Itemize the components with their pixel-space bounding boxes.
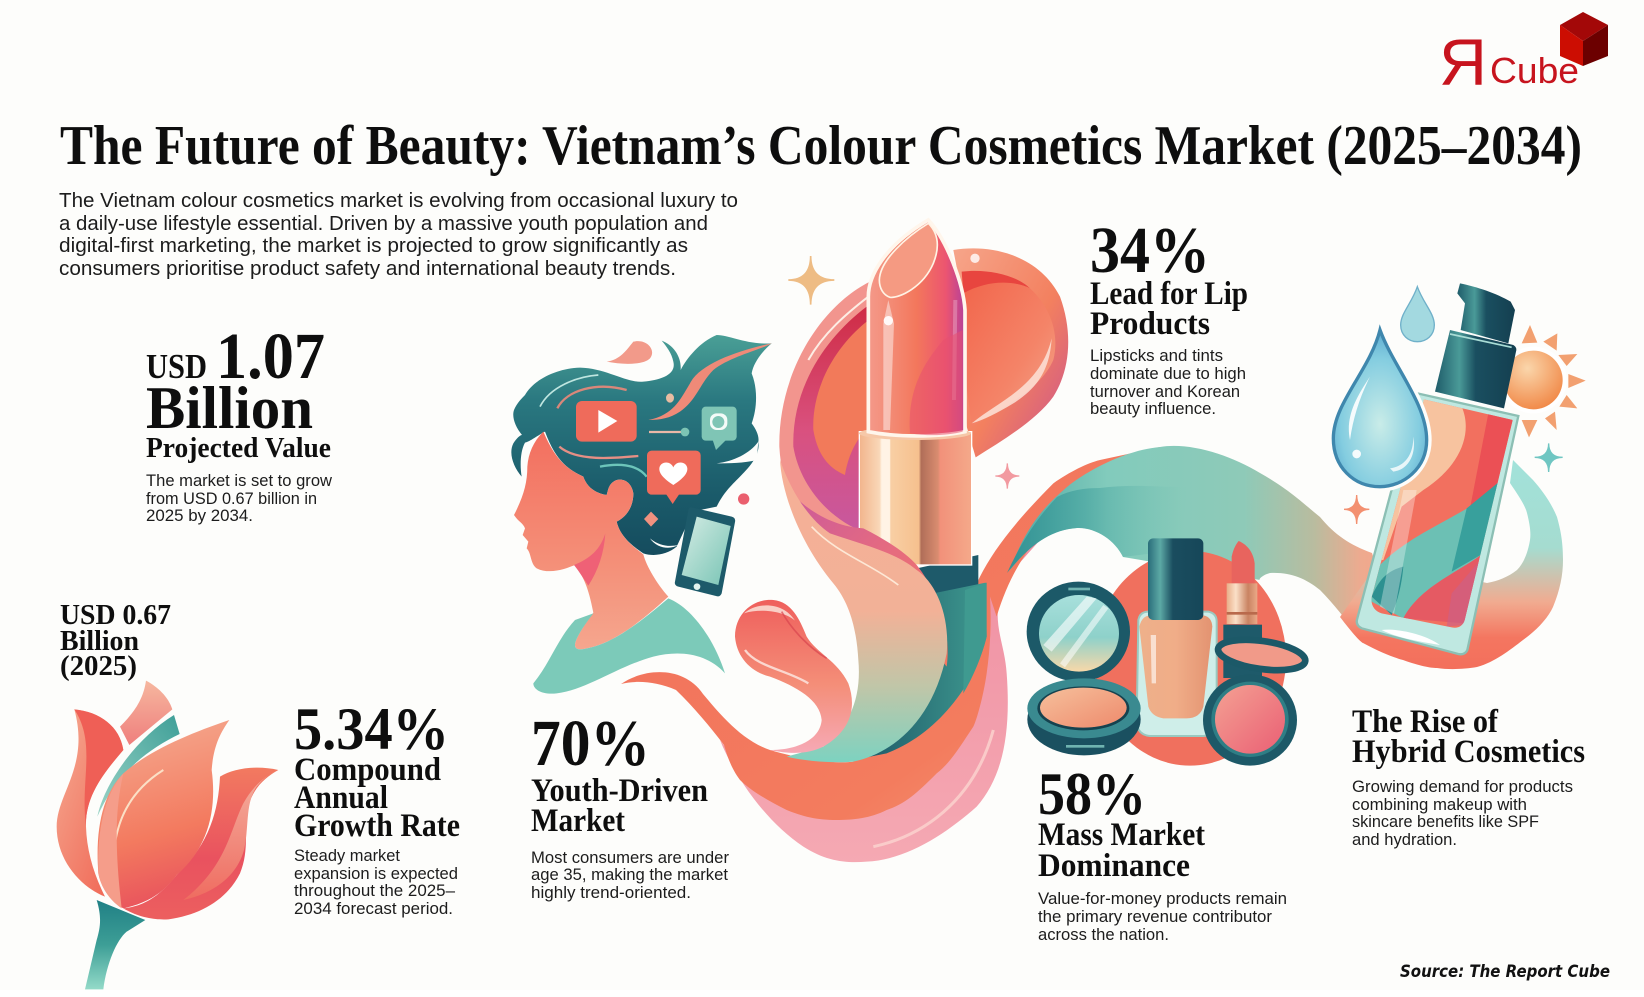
sun icon bbox=[1500, 325, 1586, 437]
ribbon: loop behind the bottle bbox=[1340, 460, 1563, 669]
ribbon: teal band across the middle bbox=[1007, 446, 1400, 643]
stat: 5.34% CAGR: Growth Rate bbox=[294, 808, 460, 844]
stat: 5.34% CAGR: 2034 forecast period. bbox=[294, 900, 453, 918]
bottle body bbox=[1357, 393, 1520, 654]
stat: USD 1.07 billion projected value: Billion bbox=[146, 375, 313, 441]
stat: 5.34% CAGR: expansion is expected bbox=[294, 865, 458, 883]
stat: 58% mass market dominance: across the nation. bbox=[1038, 926, 1169, 944]
mirror compact bbox=[1027, 582, 1130, 682]
stat: 34% lip products: Lead for Lip bbox=[1090, 276, 1248, 312]
illustration: hybrid cosmetics bottle bbox=[1333, 283, 1586, 654]
lipstick collar bbox=[859, 427, 972, 565]
lipstick base bbox=[853, 555, 987, 760]
face and neck bbox=[514, 432, 668, 649]
logo cube icon bbox=[1560, 12, 1608, 66]
sparkle: coral bbox=[1344, 495, 1369, 524]
intro paragraph: digital-first marketing, the market is projected to grow significantly as bbox=[59, 235, 688, 257]
stat: USD 0.67 billion 2025: USD 0.67 bbox=[60, 600, 171, 631]
illustration: ribbons and lipstick bbox=[621, 220, 1160, 862]
lip gloss swoosh: right bbox=[953, 248, 1068, 457]
stat: USD 1.07 billion projected value: 1.07 bbox=[216, 320, 325, 393]
stat: USD 0.67 billion 2025: (2025) bbox=[60, 651, 137, 682]
ribbon shine bbox=[812, 527, 898, 585]
icon: tulip bbox=[57, 681, 278, 989]
blush compact bbox=[1203, 635, 1307, 766]
neck shadow bbox=[574, 533, 605, 586]
icon: connector line bbox=[649, 428, 689, 436]
stat: rise of hybrid cosmetics: skincare benefits like SPF bbox=[1352, 813, 1539, 831]
stat: USD 0.67 billion 2025: Billion bbox=[60, 626, 139, 657]
logo: RCube bbox=[1439, 12, 1608, 99]
stat: 58% mass market dominance bbox=[1038, 761, 1287, 944]
stat: 58% mass market dominance: the primary revenue contributor bbox=[1038, 908, 1273, 926]
stat: USD 0.67 billion 2025 bbox=[60, 600, 171, 682]
stat: 5.34% CAGR: 5.34% bbox=[294, 696, 449, 762]
stat: 58% mass market dominance: Dominance bbox=[1038, 848, 1190, 884]
stat: USD 1.07 billion projected value: The market is set to grow bbox=[146, 472, 332, 490]
stat: 70% youth-driven market: 70% bbox=[531, 707, 650, 780]
stat: 70% youth-driven market: Most consumers are under bbox=[531, 849, 729, 867]
stat: rise of hybrid cosmetics: combining makeup with bbox=[1352, 796, 1527, 814]
stat: 70% youth-driven market: Youth-Driven bbox=[531, 773, 708, 809]
coral circle backdrop bbox=[1094, 551, 1286, 766]
coral ribbon bbox=[621, 447, 1160, 820]
pink ribbon bbox=[720, 540, 1040, 862]
intro paragraph: a daily-use lifestyle essential. Driven by a massive youth population and bbox=[59, 213, 708, 235]
lipstick bullet bbox=[868, 220, 965, 436]
stat: 70% youth-driven market: Market bbox=[531, 803, 625, 839]
stat: 5.34% CAGR: Steady market bbox=[294, 847, 400, 865]
stat: rise of hybrid cosmetics: and hydration. bbox=[1352, 831, 1457, 849]
stat: 5.34% CAGR: Compound bbox=[294, 752, 441, 788]
stat: 34% lip products: turnover and Korean bbox=[1090, 383, 1240, 401]
stat: USD 1.07 billion projected value: 2025 by 2034. bbox=[146, 507, 253, 525]
icon: chat bubble bbox=[702, 407, 737, 450]
lip gloss swoosh: left bbox=[779, 282, 870, 580]
stat: rise of hybrid cosmetics: The Rise of bbox=[1352, 704, 1499, 740]
stat: 58% mass market dominance: Value-for-money products remain bbox=[1038, 890, 1287, 908]
illustration: woman with social media icons bbox=[511, 335, 772, 694]
stat: rise of hybrid cosmetics: Hybrid Cosmetics bbox=[1352, 734, 1585, 770]
hair highlights bbox=[540, 343, 772, 548]
stat: 70% youth-driven market bbox=[531, 707, 729, 902]
stat: 34% lip products: beauty influence. bbox=[1090, 400, 1216, 418]
shoulders bbox=[533, 598, 725, 694]
lip gloss blob bbox=[735, 600, 852, 753]
drop highlights bbox=[1349, 377, 1414, 472]
stat: USD 1.07 billion projected value bbox=[146, 320, 332, 525]
ribbon highlight bbox=[873, 730, 993, 847]
icon: video play bubble bbox=[576, 401, 637, 442]
stat: USD 1.07 billion projected value: USD bbox=[146, 347, 207, 386]
stat: rise of hybrid cosmetics: Growing demand for products bbox=[1352, 778, 1573, 796]
stat: 34% lip products: Products bbox=[1090, 306, 1210, 342]
sparkle: pink bbox=[995, 463, 1019, 489]
logo wordmark: Cube bbox=[1490, 50, 1579, 91]
illustration: makeup products bbox=[1027, 538, 1307, 766]
stat: 34% lip products bbox=[1090, 214, 1248, 418]
sparkle: teal bbox=[1535, 443, 1563, 472]
stat: 5.34% CAGR bbox=[294, 696, 460, 918]
stat: 58% mass market dominance: Mass Market bbox=[1038, 817, 1205, 853]
foundation bottle bbox=[1137, 538, 1217, 736]
stat: 34% lip products: 34% bbox=[1090, 214, 1210, 287]
intro paragraph: consumers prioritise product safety and international beauty trends. bbox=[59, 258, 676, 280]
logo wordmark bbox=[1439, 25, 1579, 99]
small lipstick bbox=[1223, 541, 1262, 678]
icon: heart bubble bbox=[647, 451, 701, 504]
peach to teal ribbon bbox=[780, 460, 947, 762]
source note: Source: The Report Cube bbox=[1400, 962, 1610, 982]
intro paragraph bbox=[59, 190, 738, 280]
stat: 34% lip products: dominate due to high bbox=[1090, 365, 1246, 383]
large water drop bbox=[1333, 330, 1427, 487]
stat: USD 1.07 billion projected value: Projected Value bbox=[146, 433, 331, 464]
stat: 70% youth-driven market: highly trend-oriented. bbox=[531, 884, 691, 902]
bottle pump bbox=[1435, 283, 1516, 408]
magenta ribbon edge bbox=[783, 483, 948, 667]
icon: smartphone bbox=[675, 507, 735, 596]
accent dots bbox=[644, 393, 749, 527]
sparkle: gold bbox=[788, 256, 834, 305]
logo wordmark: Я bbox=[1439, 25, 1487, 99]
stat: 5.34% CAGR: throughout the 2025– bbox=[294, 882, 456, 900]
stat: 70% youth-driven market: age 35, making the market bbox=[531, 866, 728, 884]
petal above hair bbox=[607, 341, 652, 364]
powder compact bbox=[1027, 678, 1141, 755]
stat: 5.34% CAGR: Annual bbox=[294, 780, 388, 816]
stat: rise of hybrid cosmetics bbox=[1352, 704, 1585, 849]
hair bbox=[511, 335, 772, 555]
intro paragraph: The Vietnam colour cosmetics market is evolving from occasional luxury to bbox=[59, 190, 738, 212]
stat: 58% mass market dominance: 58% bbox=[1038, 761, 1146, 827]
stat: 34% lip products: Lipsticks and tints bbox=[1090, 347, 1223, 365]
stat: USD 1.07 billion projected value: from USD 0.67 billion in bbox=[146, 490, 317, 508]
small water drop bbox=[1401, 287, 1434, 342]
